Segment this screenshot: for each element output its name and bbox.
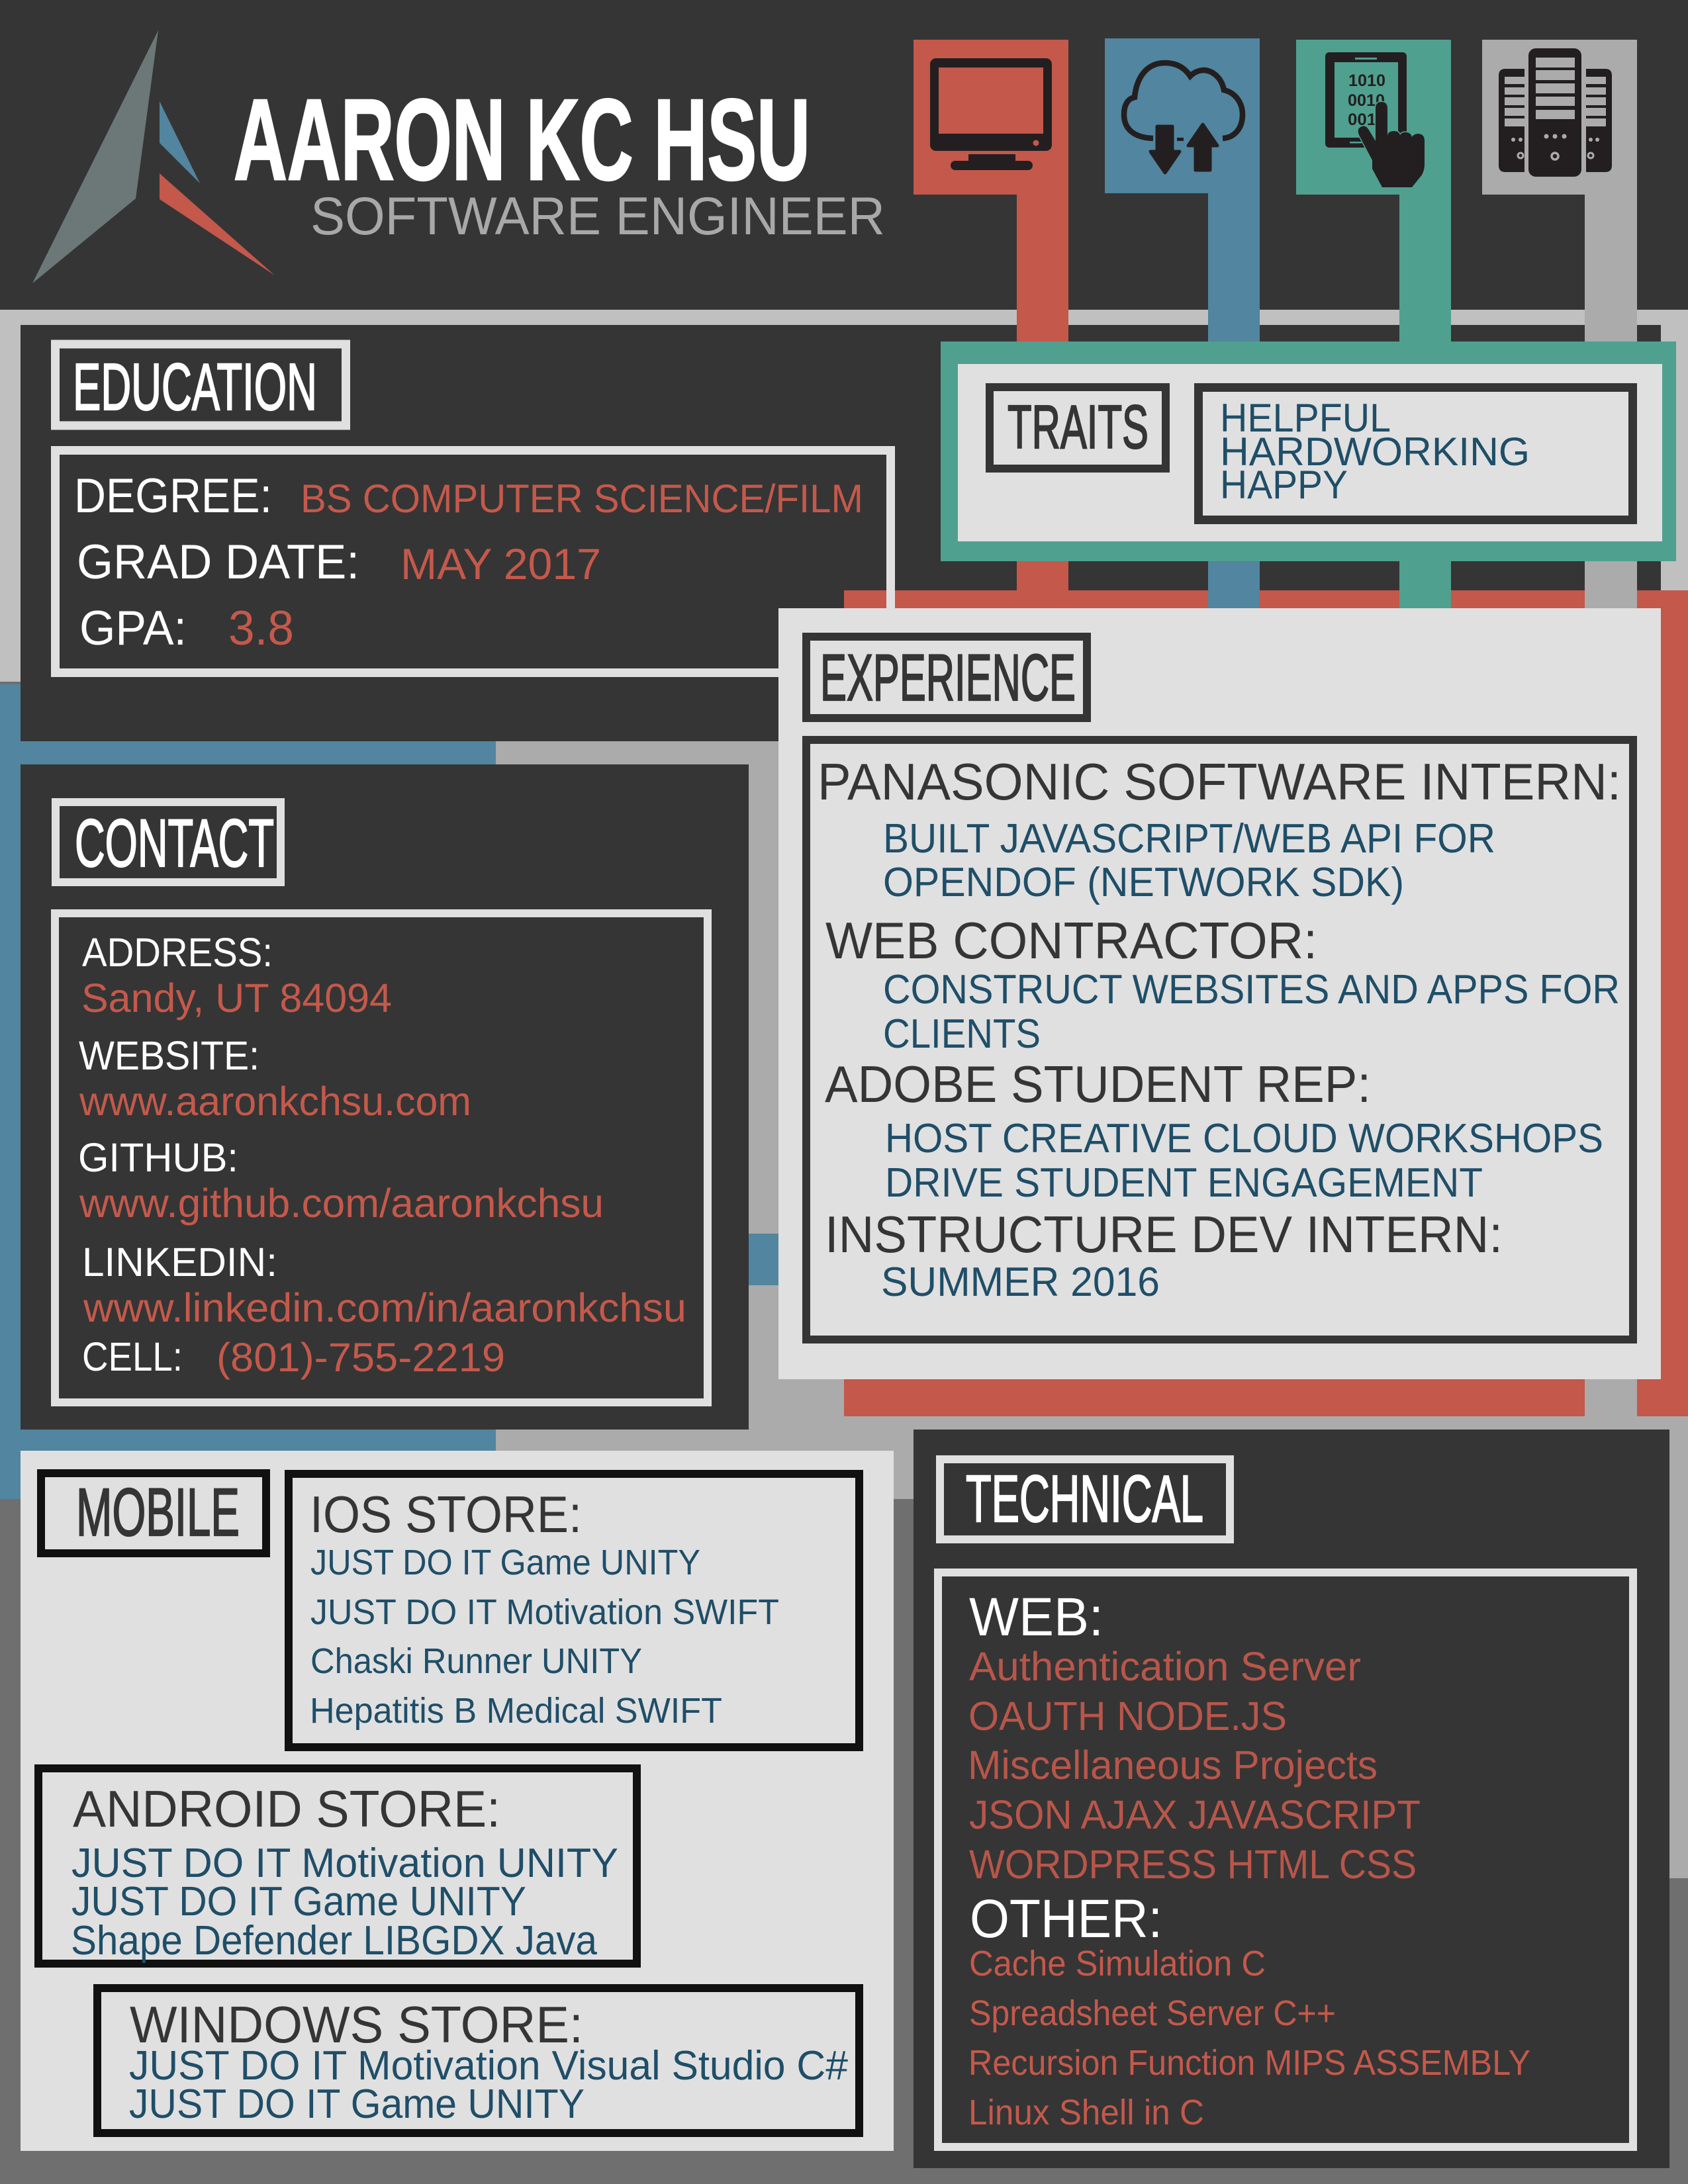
technical list: Cache Simulation C bbox=[969, 1944, 1266, 1983]
windows store: WINDOWS STORE: bbox=[130, 1995, 583, 2054]
education details: DEGREE: bbox=[74, 469, 272, 523]
ios store: IOS STORE: bbox=[310, 1485, 582, 1543]
ios store: Hepatitis B Medical SWIFT bbox=[310, 1691, 722, 1731]
experience list: HOST CREATIVE CLOUD WORKSHOPS bbox=[885, 1116, 1603, 1161]
technical list: Recursion Function MIPS ASSEMBLY bbox=[968, 2043, 1530, 2083]
experience heading bbox=[806, 637, 1087, 718]
panel: mobile bbox=[21, 1451, 894, 2151]
contact details: WEBSITE: bbox=[79, 1033, 259, 1078]
technical heading: TECHNICAL bbox=[966, 1462, 1203, 1536]
android store bbox=[38, 1768, 637, 1964]
android store: Shape Defender LIBGDX Java bbox=[71, 1918, 597, 1964]
education heading: EDUCATION bbox=[73, 350, 317, 424]
education details: MAY 2017 bbox=[400, 539, 601, 588]
experience list: BUILT JAVASCRIPT/WEB API FOR bbox=[883, 816, 1495, 862]
experience list: OPENDOF (NETWORK SDK) bbox=[883, 860, 1404, 905]
icon: servers bbox=[1482, 40, 1637, 195]
mobile heading bbox=[41, 1473, 266, 1553]
experience list: DRIVE STUDENT ENGAGEMENT bbox=[885, 1160, 1483, 1206]
technical list: OTHER: bbox=[970, 1889, 1162, 1949]
technical list: JSON AJAX JAVASCRIPT bbox=[969, 1792, 1421, 1837]
experience list: CLIENTS bbox=[883, 1011, 1041, 1057]
ios store: Chaski Runner UNITY bbox=[310, 1641, 642, 1681]
experience list bbox=[806, 740, 1633, 1340]
title: AARON KC HSU bbox=[234, 75, 810, 204]
ios store: JUST DO IT Motivation SWIFT bbox=[310, 1592, 779, 1632]
traits list: HAPPY bbox=[1220, 463, 1348, 507]
traits list: HELPFUL bbox=[1220, 396, 1391, 440]
mobile heading: MOBILE bbox=[76, 1475, 240, 1550]
panel: experience bbox=[778, 608, 1661, 1379]
traits list: HARDWORKING bbox=[1220, 430, 1530, 474]
technical list: Miscellaneous Projects bbox=[968, 1743, 1378, 1788]
technical list bbox=[938, 1572, 1633, 2147]
contact details: CELL: bbox=[82, 1334, 183, 1379]
contact details: www.linkedin.com/in/aaronkchsu bbox=[83, 1285, 686, 1330]
experience heading: EXPERIENCE bbox=[820, 641, 1076, 714]
android store: JUST DO IT Motivation UNITY bbox=[71, 1841, 618, 1886]
technical list: Linux Shell in C bbox=[968, 2093, 1204, 2132]
contact details: Sandy, UT 84094 bbox=[81, 976, 392, 1021]
experience list: INSTRUCTURE DEV INTERN: bbox=[825, 1205, 1503, 1263]
education details bbox=[56, 450, 891, 672]
traits heading bbox=[990, 387, 1166, 469]
windows store: JUST DO IT Game UNITY bbox=[129, 2081, 585, 2127]
experience list: PANASONIC SOFTWARE INTERN: bbox=[818, 752, 1621, 811]
contact heading: CONTACT bbox=[75, 805, 274, 881]
education heading bbox=[56, 344, 346, 426]
icon: tablet with touch: 0010 bbox=[1348, 91, 1385, 110]
experience list: SUMMER 2016 bbox=[881, 1259, 1160, 1305]
experience list: WEB CONTRACTOR: bbox=[825, 911, 1317, 970]
traits list bbox=[1198, 388, 1632, 520]
contact heading bbox=[56, 802, 281, 882]
technical list: Authentication Server bbox=[969, 1644, 1361, 1689]
education details: 3.8 bbox=[228, 602, 294, 655]
logo bbox=[32, 30, 275, 283]
contact details: GITHUB: bbox=[78, 1135, 238, 1180]
experience list: ADOBE STUDENT REP: bbox=[825, 1055, 1371, 1113]
contact details: ADDRESS: bbox=[82, 930, 273, 975]
subtitle: SOFTWARE ENGINEER bbox=[310, 187, 885, 246]
icon: monitor bbox=[914, 40, 1068, 195]
contact details: www.aaronkchsu.com bbox=[79, 1079, 471, 1124]
education details: GRAD DATE: bbox=[77, 535, 359, 589]
experience list: CONSTRUCT WEBSITES AND APPS FOR bbox=[883, 967, 1620, 1013]
technical list: WORDPRESS HTML CSS bbox=[969, 1842, 1417, 1887]
windows store bbox=[97, 1988, 859, 2133]
android store: JUST DO IT Game UNITY bbox=[71, 1879, 526, 1925]
education details: GPA: bbox=[79, 602, 187, 655]
contact details: LINKEDIN: bbox=[82, 1240, 277, 1285]
traits heading: TRAITS bbox=[1008, 392, 1149, 461]
android store: ANDROID STORE: bbox=[73, 1780, 500, 1838]
panel: education bbox=[21, 325, 1661, 741]
technical list: WEB: bbox=[969, 1587, 1103, 1647]
panel: contact bbox=[21, 764, 749, 1430]
icon: tablet with touch: 1010 bbox=[1348, 71, 1385, 90]
contact details: www.github.com/aaronkchsu bbox=[79, 1181, 604, 1226]
icon: cloud transfer bbox=[1105, 38, 1260, 193]
contact details bbox=[55, 913, 708, 1402]
panel: traits bbox=[941, 341, 1676, 561]
panel: technical bbox=[914, 1430, 1669, 2168]
technical list: OAUTH NODE.JS bbox=[968, 1694, 1287, 1739]
ios store: JUST DO IT Game UNITY bbox=[310, 1543, 700, 1582]
technical list: Spreadsheet Server C++ bbox=[969, 1993, 1336, 2033]
icon: tablet with touch bbox=[1296, 40, 1451, 195]
education details: BS COMPUTER SCIENCE/FILM bbox=[301, 477, 863, 521]
windows store: JUST DO IT Motivation Visual Studio C# bbox=[129, 2043, 848, 2089]
ios store bbox=[289, 1474, 859, 1747]
technical heading bbox=[940, 1459, 1230, 1539]
icon: tablet with touch: 0011 bbox=[1348, 111, 1385, 129]
connector stems bbox=[1017, 193, 1637, 1430]
contact details: (801)-755-2219 bbox=[216, 1335, 505, 1380]
